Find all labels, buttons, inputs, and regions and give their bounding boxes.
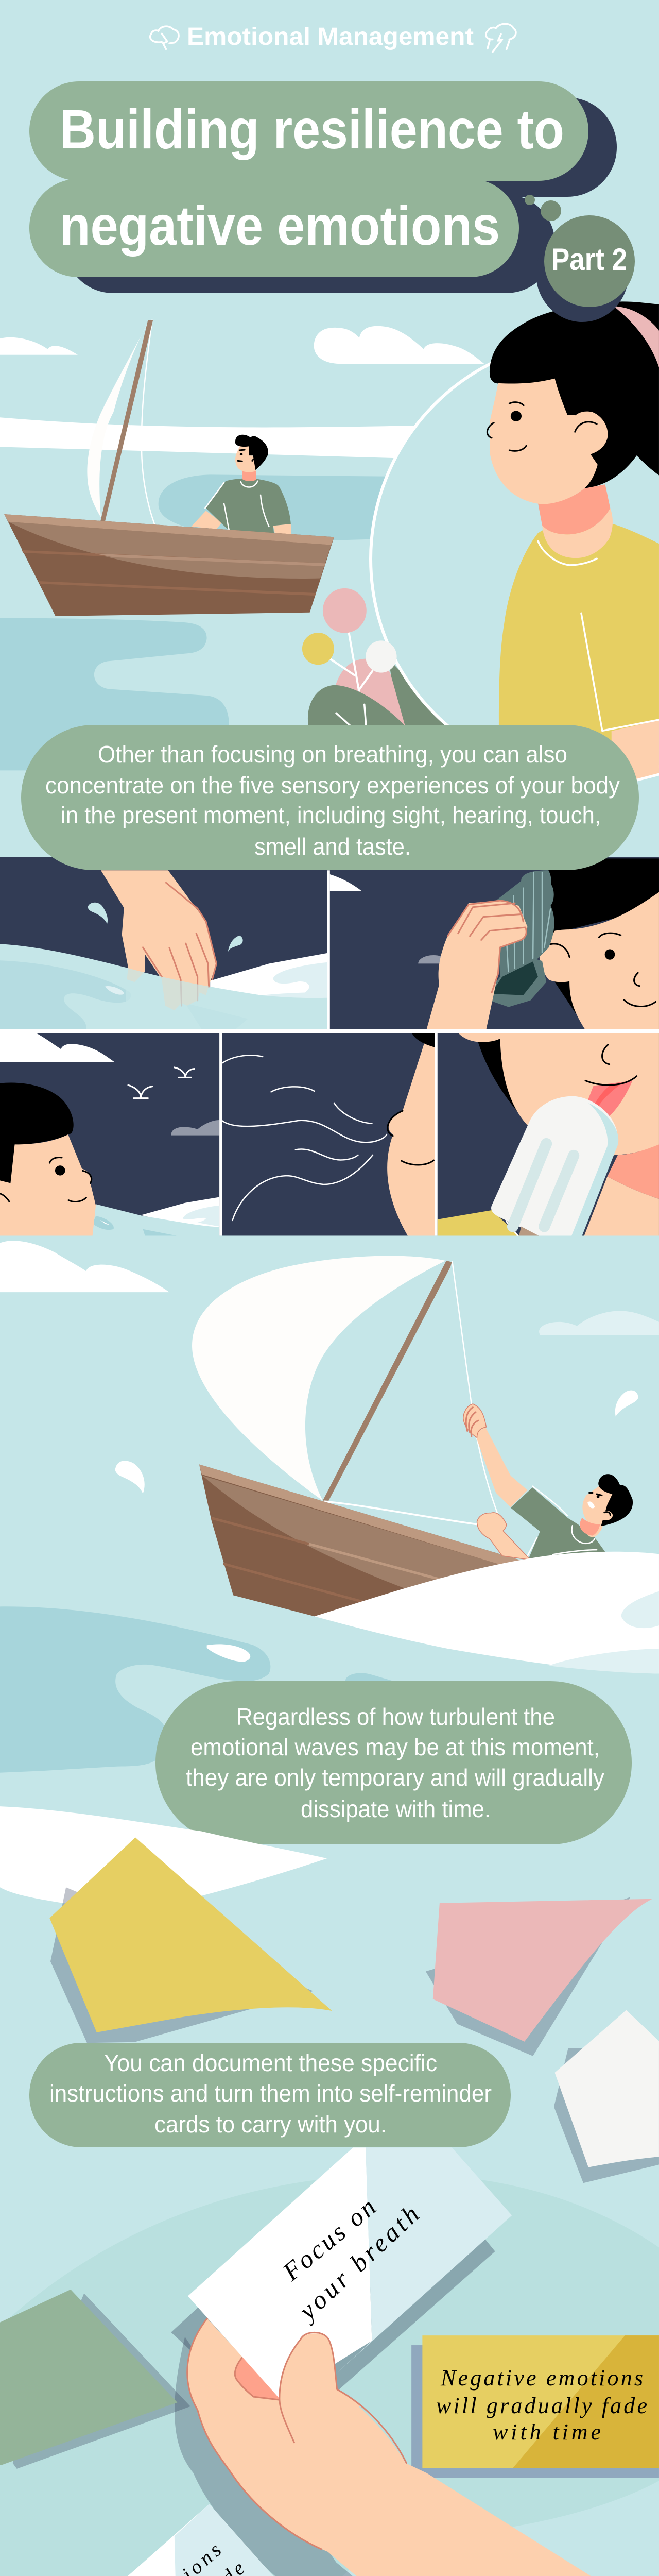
title backing shadow 2 <box>64 195 555 293</box>
backdrop blob <box>0 2174 659 2576</box>
callout line 4: dissipate with time. <box>301 1795 491 1822</box>
cloud left <box>0 1241 169 1292</box>
card text: Focus on your breath: Focus on <box>276 2192 381 2286</box>
card text: yellow reminder <box>436 2365 647 2445</box>
card body <box>21 2504 298 2576</box>
hair <box>490 301 659 488</box>
shirt <box>499 524 659 754</box>
callout line 2: concentrate on the five sensory experiences of your body <box>45 772 620 799</box>
collar <box>538 541 597 565</box>
header: Emotional Management <box>150 23 516 52</box>
white card top right <box>554 2010 659 2183</box>
panel: five senses row 1 <box>0 857 659 1029</box>
blue wave small blob <box>345 1673 399 1683</box>
scene: hand holding cards <box>0 2010 659 2576</box>
mast <box>100 320 153 521</box>
part badge shadow <box>536 225 629 322</box>
white bud <box>366 640 397 673</box>
panel: five senses row 2 <box>0 1033 659 1235</box>
sail <box>192 1256 445 1501</box>
illustration: small boat with sailor <box>4 320 334 616</box>
callout line 3: cards to carry with you. <box>154 2111 387 2138</box>
sight: birds <box>128 1067 194 1098</box>
pink leaf <box>334 659 406 727</box>
mast <box>323 1261 452 1501</box>
sight: boy features <box>0 1158 92 1202</box>
card: Focus on your breath <box>188 2147 512 2399</box>
title pill 2 <box>29 179 519 277</box>
pink card <box>426 1897 652 2056</box>
ropes <box>452 1261 497 1513</box>
title line 2: negative emotions <box>60 194 500 257</box>
heading text: Emotional Management <box>187 23 474 50</box>
blue wave lower left <box>0 618 229 770</box>
tilted reminder card <box>21 2504 298 2576</box>
yellow reminder line 2: will gradually fade <box>436 2393 647 2418</box>
sailor <box>463 1404 633 1560</box>
illustration: girl looking up <box>487 301 659 781</box>
touch: sea base <box>0 944 327 1029</box>
callout line 2: emotional waves may be at this moment, <box>190 1734 600 1760</box>
water drops <box>115 1391 638 1494</box>
white wave <box>315 1552 659 1673</box>
thought dot <box>541 200 561 221</box>
icon: storm cloud <box>486 24 516 52</box>
splash in wave <box>207 1644 250 1662</box>
callout line 3: they are only temporary and will gradually <box>186 1764 604 1791</box>
palm shadow <box>235 2357 280 2400</box>
part badge <box>544 215 635 307</box>
callout: emotional waves <box>155 1681 632 1844</box>
smell: divider <box>219 1033 222 1235</box>
hearing: grey cloud <box>418 955 441 963</box>
hearing: facial features <box>548 933 655 1007</box>
thought bubble title <box>29 81 635 322</box>
hearing: hair <box>548 858 659 1013</box>
callout line 3: in the present moment, including sight, hearing, touch, <box>61 802 601 828</box>
taste: divider <box>435 1033 438 1235</box>
white wave band <box>0 417 424 459</box>
title backing shadow 1 <box>438 97 617 197</box>
flower: dark leaf <box>389 659 462 736</box>
arm shadow <box>175 2337 659 2576</box>
lower neck <box>542 508 613 558</box>
white wave <box>0 1806 327 1906</box>
arm <box>612 720 659 780</box>
touch: highlight <box>105 986 124 995</box>
pale wave accent <box>548 1591 659 1673</box>
scene: blank cards <box>0 1806 652 2056</box>
arm and fingers <box>187 2318 659 2576</box>
hearing: face <box>569 892 659 1029</box>
sailor <box>191 435 291 535</box>
card text: yellow reminder: Negative emotions <box>440 2365 643 2391</box>
illustration: flowers <box>302 588 406 727</box>
callout line 1: You can document these specific <box>104 2049 437 2076</box>
sight: cloud <box>0 1033 115 1062</box>
smell: wind lines <box>222 1055 387 1221</box>
frame: divider row <box>0 1029 659 1033</box>
card text: Focus on your breath <box>276 2192 425 2327</box>
hearing: divider <box>327 870 330 1029</box>
scene: storm boat <box>0 1241 659 1773</box>
callout line 1: Regardless of how turbulent the <box>236 1703 555 1730</box>
boat hull <box>199 1464 521 1616</box>
pale cloud right <box>539 1311 659 1335</box>
sleeve line <box>581 613 659 731</box>
title pill 1 <box>29 81 588 181</box>
part label: Part 2 <box>551 242 627 277</box>
yellow reminder card <box>411 2335 659 2478</box>
thumb <box>280 2332 406 2463</box>
water drops <box>88 903 243 953</box>
title line 1: Building resilience to <box>60 98 564 160</box>
taste: tongue <box>586 1080 633 1116</box>
yellow bud <box>302 633 334 665</box>
bubble circle around girl <box>371 340 659 778</box>
stems <box>330 633 372 691</box>
panel background <box>0 1033 659 1235</box>
taste: nose and mouth <box>585 1045 637 1085</box>
pink bud <box>323 588 367 633</box>
face <box>490 379 608 504</box>
hearing: cloud <box>330 874 361 891</box>
callout: reminder cards <box>29 2043 511 2147</box>
yellow reminder line 3: with time <box>493 2419 601 2445</box>
smell: hair <box>412 1033 435 1047</box>
taste: popsicle <box>491 1096 618 1235</box>
sight: boy hair <box>0 1082 74 1184</box>
scene: clouds and sea behind the boat <box>0 326 484 770</box>
green leaf <box>308 685 406 727</box>
sight: sea <box>91 1197 219 1235</box>
sight: boy face <box>0 1134 96 1235</box>
hearing: ear <box>540 929 571 982</box>
taste: ear <box>458 1033 500 1042</box>
card shadow <box>171 2240 495 2392</box>
smell: nose and mouth <box>388 1111 433 1165</box>
sail <box>87 320 149 517</box>
hair band <box>614 306 659 367</box>
neck shadow <box>538 484 610 534</box>
hearing: hand <box>427 901 527 1029</box>
rope <box>142 320 154 524</box>
facial features <box>487 402 597 451</box>
taste: shirt <box>438 1210 519 1235</box>
callout line 4: smell and taste. <box>254 833 411 860</box>
panel background <box>0 857 659 1029</box>
blue wave behind sailor <box>159 474 404 541</box>
cloud middle <box>314 326 484 364</box>
boat hull <box>4 514 334 616</box>
small thought dot <box>525 195 535 205</box>
cloud left <box>0 337 78 355</box>
taste: face <box>500 1033 659 1156</box>
sight: grey cloud <box>171 1120 219 1136</box>
hearing: shell <box>490 870 554 1007</box>
yellow card <box>49 1837 332 2043</box>
smell: face <box>387 1042 435 1235</box>
touch: hand <box>101 870 216 1010</box>
callout line 2: instructions and turn them into self-reminder <box>49 2080 492 2107</box>
taste: neck <box>608 1144 659 1199</box>
taste: hair <box>477 1039 530 1125</box>
callout: five senses <box>21 725 639 870</box>
card text line 2: your breath <box>291 2200 425 2327</box>
icon: cloud <box>150 26 179 49</box>
callout line 1: Other than focusing on breathing, you can also <box>98 741 567 768</box>
blue wave <box>0 1606 270 1773</box>
green card <box>0 2290 190 2469</box>
touch: water overlay <box>126 968 261 1029</box>
